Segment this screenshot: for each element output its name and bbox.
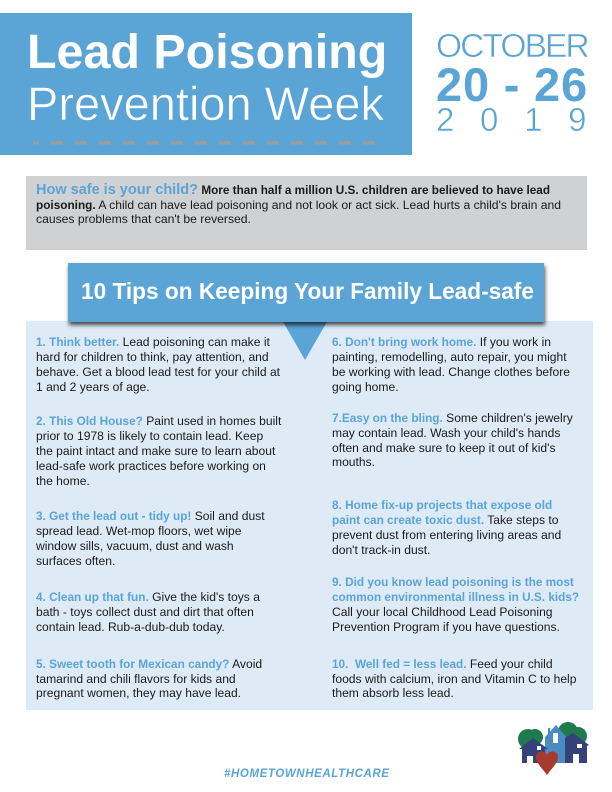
tips right column: 10. Well fed = less lead. Feed your child bbox=[332, 657, 553, 671]
intro text bbox=[36, 182, 561, 226]
tips right column: don't track-in dust. bbox=[332, 543, 430, 557]
tips right column: often and make sure to keep it out of kid's bbox=[332, 441, 556, 455]
dates: 20 - 26 bbox=[436, 58, 588, 111]
dashed divider bbox=[33, 142, 375, 144]
tips left column: 1 and 2 years of age. bbox=[36, 380, 150, 394]
tips right column: painting, remodelling, auto repair, you might bbox=[332, 350, 567, 364]
tips heading banner bbox=[68, 263, 544, 322]
title line 1: Lead Poisoning bbox=[27, 25, 387, 79]
tips right column: prevent dust from entering living areas and bbox=[332, 528, 561, 542]
date block bbox=[436, 28, 612, 138]
tips left column: the home. bbox=[36, 474, 90, 488]
tips left column: bath - toys collect dust and dirt that often bbox=[36, 605, 254, 619]
tips left column: 1. Think better. Lead poisoning can make it bbox=[36, 335, 270, 349]
tips right column bbox=[332, 335, 579, 700]
header banner bbox=[0, 13, 412, 155]
tips right column: them absorb less lead. bbox=[332, 686, 454, 700]
tip 10 bbox=[332, 657, 576, 700]
tips left column: pregnant women, they may have lead. bbox=[36, 686, 241, 700]
heading text: 10 Tips on Keeping Your Family Lead-safe bbox=[81, 278, 534, 304]
tip 8 bbox=[332, 498, 561, 557]
tips right column: be working with lead. Change clothes before bbox=[332, 365, 570, 379]
tips left column bbox=[36, 335, 282, 700]
tips left column: prior to 1978 is likely to contain lead. Keep bbox=[36, 429, 263, 443]
tips left column: the paint intact and make sure to learn about bbox=[36, 444, 275, 458]
tips right column: going home. bbox=[332, 380, 399, 394]
tip 6 bbox=[332, 335, 570, 394]
tips left column: surfaces often. bbox=[36, 554, 115, 568]
tip 3 bbox=[36, 509, 265, 568]
tips left column: spread lead. Wet-mop floors, wet wipe bbox=[36, 524, 241, 538]
tips left column: 2. This Old House? Paint used in homes built bbox=[36, 414, 281, 428]
tips left column: lead-safe work practices before working on bbox=[36, 459, 266, 473]
hashtag: #HOMETOWNHEALTHCARE bbox=[224, 768, 390, 780]
tips right column: may contain lead. Wash your child's hands bbox=[332, 426, 560, 440]
tips right column: 6. Don't bring work home. If you work in bbox=[332, 335, 551, 349]
intro text: poisoning. A child can have lead poisoning and not look or act sick. Lead hurts a child's brain and bbox=[36, 198, 561, 212]
tips left column: tamarind and chili flavors for kids and bbox=[36, 672, 236, 686]
month: OCTOBER bbox=[436, 28, 588, 65]
tip 4 bbox=[36, 590, 260, 634]
tips left column: contain lead. Rub-a-dub-dub today. bbox=[36, 620, 225, 634]
tips right column: mouths. bbox=[332, 455, 375, 469]
callout pointer bbox=[283, 322, 327, 360]
tips right column: common environmental illness in U.S. kids? bbox=[332, 590, 579, 604]
tip 9 bbox=[332, 575, 579, 634]
tips panel bbox=[26, 321, 593, 710]
tips left column: 3. Get the lead out - tidy up! Soil and dust bbox=[36, 509, 265, 523]
tips left column: behave. Get a blood lead test for your child at bbox=[36, 365, 280, 379]
tips right column: 7.Easy on the bling. Some children's jewelry bbox=[332, 411, 573, 425]
tips right column: 8. Home fix-up projects that expose old bbox=[332, 498, 552, 512]
title line 2: Prevention Week bbox=[27, 77, 384, 130]
tips left column: 5. Sweet tooth for Mexican candy? Avoid bbox=[36, 657, 262, 671]
tips right column: Prevention Program if you have questions. bbox=[332, 620, 560, 634]
tip 1 bbox=[36, 335, 280, 394]
tips left column: hard for children to think, pay attention, and bbox=[36, 350, 269, 364]
tips left column: window sills, vacuum, dust and wash bbox=[36, 539, 234, 553]
intro panel bbox=[26, 176, 587, 250]
tip 5 bbox=[36, 657, 262, 700]
tips left column: 4. Clean up that fun. Give the kid's toys a bbox=[36, 590, 260, 604]
tips right column: paint can create toxic dust. Take steps to bbox=[332, 513, 558, 527]
intro text: causes problems that can't be reversed. bbox=[36, 212, 251, 226]
tip 7 bbox=[332, 411, 573, 469]
tips right column: Call your local Childhood Lead Poisoning bbox=[332, 605, 553, 619]
tips right column: 9. Did you know lead poisoning is the most bbox=[332, 575, 574, 589]
intro text: How safe is your child? More than half a million U.S. children are believed to have lead bbox=[36, 182, 550, 198]
year: 2019 bbox=[436, 101, 612, 138]
tips right column: foods with calcium, iron and Vitamin C to help bbox=[332, 672, 576, 686]
icon: houses and heart logo bbox=[518, 722, 589, 775]
tip 2 bbox=[36, 414, 282, 488]
